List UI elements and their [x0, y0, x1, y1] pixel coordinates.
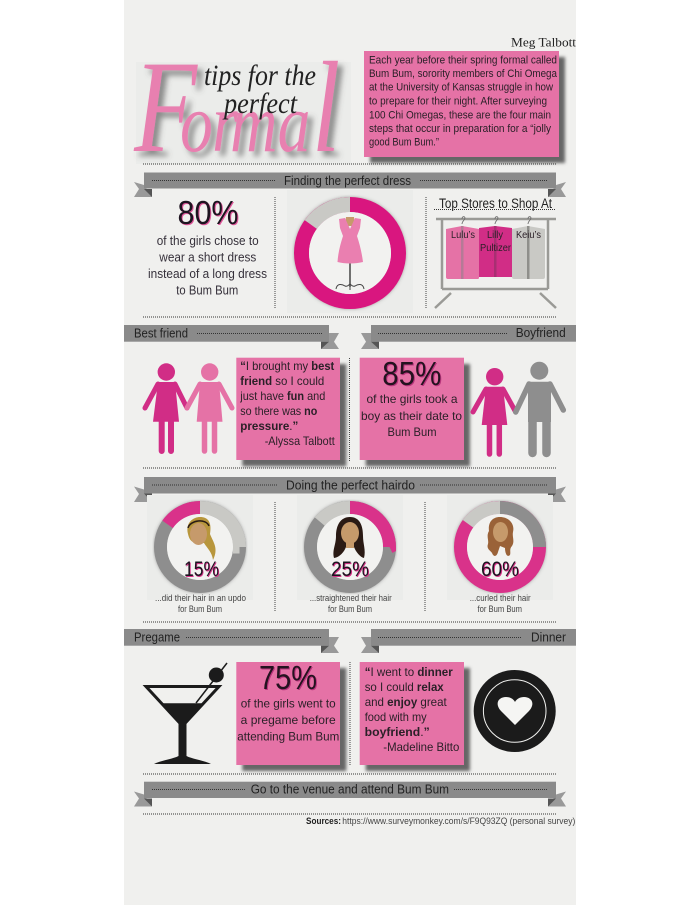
quote: Alyssa Talbott — [236, 358, 346, 466]
stat: 80% short dress: to Bum Bum — [176, 284, 238, 298]
chart: dress donut 85/15 — [287, 190, 413, 313]
icon: updo hair — [187, 517, 216, 560]
intro callout: 100 Chi Omegas, these are the four main — [369, 109, 551, 121]
quote: Alyssa Talbott: so there was no — [240, 404, 317, 418]
author byline: Meg Talbott — [511, 34, 576, 50]
stat: 80% short dress: wear a short dress — [158, 251, 256, 265]
ribbon: Pregame: Pregame — [134, 630, 180, 645]
quote: Alyssa Talbott: “I brought my best — [240, 359, 334, 373]
ribbon: Best friend: Best friend — [134, 326, 188, 340]
title: Formal: l — [312, 36, 340, 180]
garment: Keiu's: Keiu’s — [516, 230, 541, 241]
chart: hair updo 15%: 15% — [184, 558, 219, 581]
intro callout: steps that occur in preparation for a “jolly — [369, 123, 551, 135]
ribbon: Doing the perfect hairdo — [134, 477, 566, 502]
chart: hair straightened 25% — [294, 491, 406, 603]
title: tips for the perfect — [204, 59, 316, 120]
caption: straightened: ...straightened their hair — [310, 593, 392, 603]
icon: curly hair — [488, 517, 513, 556]
intro callout: at the University of Kansas struggle in how — [369, 82, 553, 94]
ribbon: Finding the perfect dress — [134, 172, 566, 197]
stat: 80% short dress — [148, 194, 267, 298]
icon: girl — [473, 368, 516, 454]
intro callout: good Bum Bum.” — [369, 137, 439, 149]
title: Formal: F — [133, 34, 199, 180]
garment: Lulu's: Lulu’s — [451, 230, 475, 241]
caption: straightened: for Bum Bum — [328, 604, 372, 614]
quote: Madeline Bitto — [360, 662, 470, 771]
stat: 75% pregame: attending Bum Bum — [237, 730, 339, 744]
quote: Madeline Bitto: food with my — [365, 710, 427, 724]
stat: 85% took a boy — [360, 355, 470, 466]
stat: 75% pregame: 75% — [260, 660, 318, 697]
quote: Alyssa Talbott: pressure.” — [240, 419, 298, 433]
ribbon: Finding the perfect dress: Finding the perfect dress — [284, 173, 411, 188]
quote: Madeline Bitto: so I could relax — [365, 680, 444, 694]
icon: girl one — [145, 363, 187, 451]
garment: Lilly Pultizer: Lilly — [487, 230, 503, 241]
ribbon: Boyfriend: Boyfriend — [516, 325, 566, 340]
chart: hair curled 60%: 60% — [482, 559, 520, 582]
stat: 80% short dress: of the girls chose to — [157, 234, 259, 248]
caption: curled — [470, 593, 531, 614]
chart: hair straightened 25%: 25% — [331, 558, 369, 581]
title block — [133, 34, 351, 180]
title: Formal: o — [180, 77, 213, 170]
quote: Alyssa Talbott: just have fun and — [239, 389, 325, 403]
stat: 75% pregame: a pregame before — [241, 713, 336, 727]
stat: 80% short dress: 80% — [178, 194, 238, 231]
stat: 80% short dress: instead of a long dress — [148, 267, 267, 281]
sources: Sources: — [306, 816, 341, 826]
title: tips for the perfect: tips for the — [204, 59, 316, 92]
clothing rack: top stores: Top Stores to Shop At — [439, 196, 552, 211]
ribbon: Go to the venue: Go to the venue and attend Bum Bum — [251, 782, 449, 796]
ribbon: Doing the perfect hairdo: Doing the perfect hairdo — [286, 478, 415, 492]
intro callout: Bum Bum, sorority members of Chi Omega — [369, 68, 558, 80]
quote: Madeline Bitto: boyfriend.” — [365, 725, 430, 739]
quote: Madeline Bitto: -Madeline Bitto — [383, 740, 460, 754]
intro callout: Each year before their spring formal called — [369, 54, 557, 66]
stat: 75% pregame — [236, 659, 346, 771]
quote: Alyssa Talbott: -Alyssa Talbott — [265, 434, 335, 448]
clothing rack: top stores — [434, 196, 556, 308]
caption: updo: for Bum Bum — [178, 604, 222, 614]
stat: 85% took a boy: 85% — [383, 356, 442, 393]
chart: hair updo 15%: 15% — [185, 559, 220, 582]
sources: https://www.surveymonkey.com/s/F9Q93ZQ (personal survey) — [342, 816, 575, 826]
ribbon: Dinner — [361, 629, 576, 653]
stat: 85% took a boy: Bum Bum — [388, 425, 436, 439]
chart: hair curled 60%: 60% — [481, 558, 519, 581]
ribbon: Pregame — [124, 629, 339, 653]
stat: 85% took a boy: of the girls took a — [366, 392, 458, 406]
caption: straightened — [310, 593, 392, 614]
ribbon: Best friend — [124, 325, 339, 349]
stat: 85% took a boy: boy as their date to — [361, 409, 462, 423]
caption: curled: for Bum Bum — [478, 604, 522, 614]
ribbon: Dinner: Dinner — [531, 630, 567, 645]
caption: updo — [155, 593, 246, 614]
icon: straight hair — [333, 517, 365, 558]
icon: heart badge — [474, 670, 556, 752]
chart: hair curled 60% — [445, 492, 555, 602]
garment: Lilly Pultizer — [479, 217, 512, 277]
chart: hair updo 15% — [145, 492, 255, 602]
ribbon: Boyfriend — [361, 325, 576, 349]
quote: Madeline Bitto: “I went to dinner — [365, 665, 453, 679]
title: Formal: r — [212, 77, 238, 170]
icon: boy — [516, 362, 563, 453]
stat: 85% took a boy: 85% — [382, 355, 441, 392]
caption: updo: ...did their hair in an updo — [155, 593, 246, 603]
quote: Madeline Bitto: and enjoy great — [365, 695, 447, 709]
intro callout: to prepare for their night. After surveying — [369, 96, 547, 108]
stat: 75% pregame: 75% — [259, 659, 317, 696]
background panel — [124, 0, 576, 905]
icon: martini glass — [146, 663, 227, 764]
icon: two girls holding hands — [145, 363, 232, 451]
stat: 75% pregame: of the girls went to — [241, 697, 336, 711]
title: tips for the perfect: perfect — [222, 87, 298, 120]
caption: curled: ...curled their hair — [470, 593, 531, 603]
intro callout — [364, 51, 565, 163]
title: Formal: a — [278, 77, 310, 170]
quote: Alyssa Talbott: friend so I could — [240, 374, 324, 388]
title: Formal: m — [230, 77, 277, 170]
ribbon: Go to the venue — [134, 782, 566, 806]
icon: girl and boy holding hands — [473, 362, 563, 454]
stat: 80% short dress: 80% — [178, 195, 240, 232]
garment: Lilly Pultizer: Pultizer — [480, 243, 512, 254]
title: Formal — [133, 34, 340, 180]
icon: dress on mannequin — [336, 217, 364, 290]
chart: hair straightened 25%: 25% — [332, 559, 370, 582]
icon: girl two — [187, 363, 232, 451]
